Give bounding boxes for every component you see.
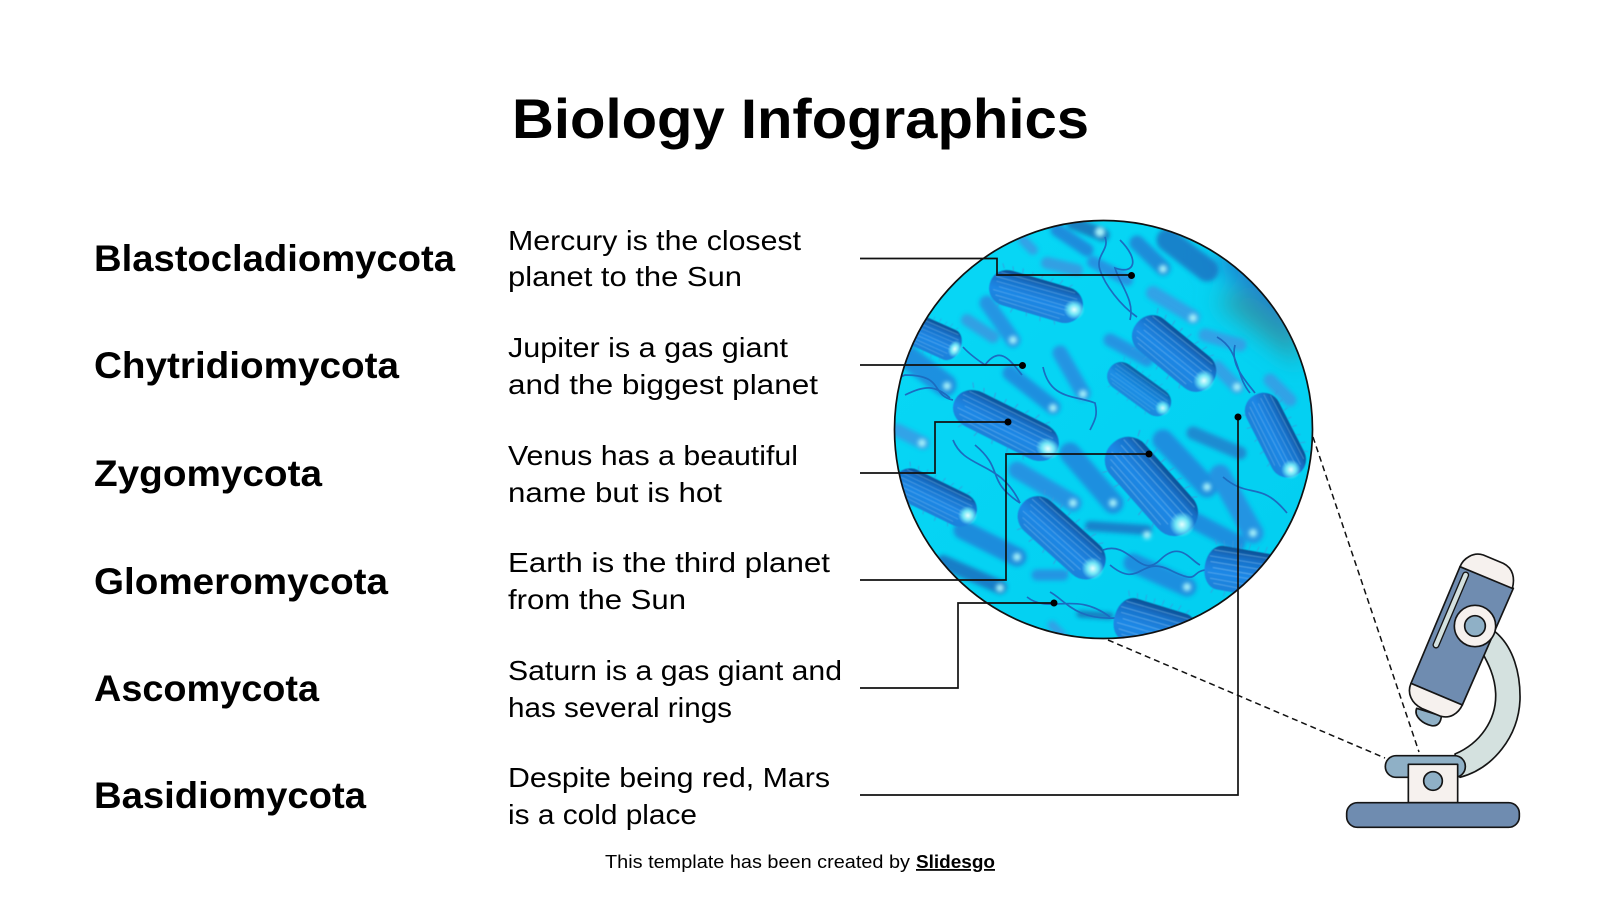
microscope icon <box>1347 554 1520 827</box>
callout line 2 <box>860 362 1026 369</box>
row 6 description: Despite being red, Mars <box>508 762 830 793</box>
footer credit: Slidesgo <box>916 852 995 872</box>
callout line 5 <box>860 600 1058 688</box>
row 1 description: Mercury is the closest <box>508 225 801 256</box>
background bacteria <box>897 223 1290 635</box>
row 6 label: Basidiomycota <box>94 775 366 816</box>
stage <box>1385 756 1465 777</box>
row 2 description: and the biggest planet <box>508 369 818 400</box>
row 5 label: Ascomycota <box>94 668 319 709</box>
row 2 description: Jupiter is a gas giant <box>508 332 788 363</box>
row 5 description: Saturn is a gas giant and <box>508 655 842 686</box>
row 4 description <box>508 547 830 615</box>
title: Biology Infographics <box>512 87 1089 150</box>
row 1 description <box>508 225 801 292</box>
base <box>1347 803 1519 827</box>
row 1 description: planet to the Sun <box>508 261 742 292</box>
blurred background patch, upper right <box>1205 240 1300 365</box>
infographic slide <box>95 98 1521 872</box>
row 2 description <box>508 332 818 400</box>
row 3 description: Venus has a beautiful <box>508 440 798 471</box>
tube slot <box>1436 575 1466 645</box>
row 4 description: Earth is the third planet <box>508 547 830 578</box>
row 6 description: is a cold place <box>508 799 697 830</box>
pillar knob <box>1424 772 1442 790</box>
bacteria tips <box>918 227 1257 592</box>
objective lens <box>1416 708 1441 726</box>
row 5 description <box>508 655 842 723</box>
tube top cap <box>1460 554 1513 588</box>
callout line 3 <box>860 418 1012 473</box>
row 5 description: has several rings <box>508 692 732 723</box>
footer credit: This template has been created by <box>605 852 910 872</box>
row 4 description: from the Sun <box>508 584 686 615</box>
tube bottom cap <box>1409 683 1462 717</box>
microscope view: bacteria circle <box>894 220 1314 640</box>
callout line 1 <box>860 258 1135 279</box>
callout line 6 <box>860 414 1242 795</box>
row 3 label: Zygomycota <box>94 453 322 494</box>
dashed projection lines <box>1108 437 1419 758</box>
callout line 4 <box>860 450 1152 580</box>
row 2 label: Chytridiomycota <box>94 345 399 386</box>
row 4 label: Glomeromycota <box>94 561 388 602</box>
row 3 description <box>508 440 798 508</box>
pillar <box>1408 764 1458 803</box>
row 6 description <box>508 762 830 830</box>
row 3 description: name but is hot <box>508 477 722 508</box>
arm <box>1455 632 1520 777</box>
row 1 label: Blastocladiomycota <box>94 238 455 279</box>
flagella <box>895 237 1287 618</box>
tube body <box>1411 567 1513 705</box>
foreground bacteria <box>900 263 1308 638</box>
focus wheel <box>1454 605 1496 647</box>
